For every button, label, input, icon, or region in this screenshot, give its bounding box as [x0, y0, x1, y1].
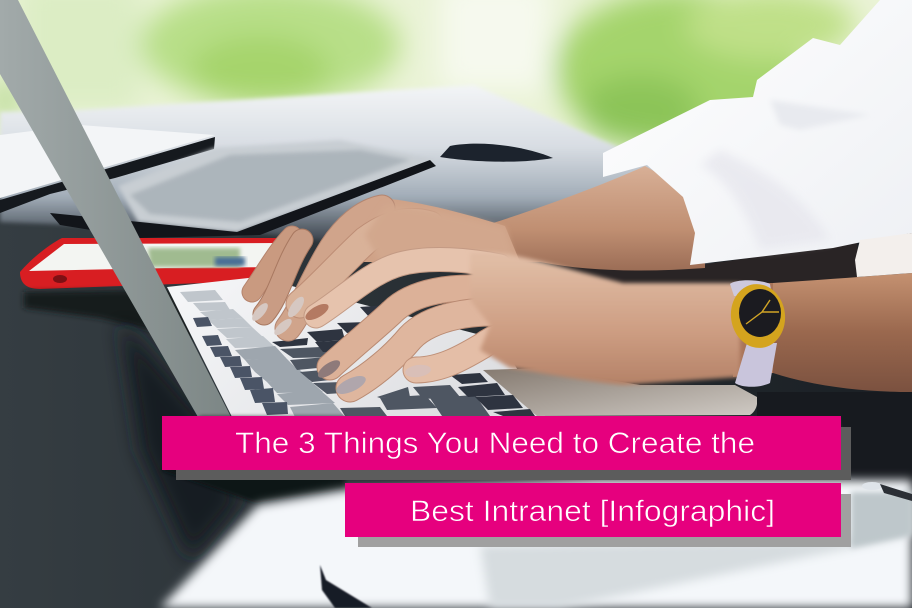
- wristwatch: [727, 280, 789, 387]
- laptop keyboard keys: [180, 290, 535, 417]
- far hand: [249, 198, 520, 338]
- laptop lid: [0, 0, 231, 417]
- dark tabletop strip between the arms: [545, 243, 860, 290]
- first title banner: [162, 416, 841, 470]
- far hand fingernails: [249, 294, 307, 338]
- second title banner: Best Intranet [Infographic]: [410, 495, 775, 528]
- computer mouse: [440, 144, 553, 162]
- dark desk surface: [0, 190, 912, 608]
- blurred foreground glass reflection: [160, 480, 912, 608]
- dark shadow beside laptop lid: [120, 320, 240, 560]
- bright reflective rear desk: [0, 85, 710, 270]
- tablet on desk: [0, 125, 215, 213]
- near hand and forearm: [303, 253, 912, 398]
- background wireless keyboard: [50, 140, 436, 238]
- first banner shadow: [176, 427, 851, 480]
- second banner shadow: [358, 494, 851, 547]
- dark shadow behind banners: [162, 417, 345, 503]
- laptop base: [167, 277, 545, 417]
- first title banner: The 3 Things You Need to Create the: [235, 427, 755, 460]
- dark desk right of laptop: [757, 392, 912, 492]
- white shirt sleeve: [603, 0, 912, 277]
- red smartphone: [20, 238, 284, 289]
- dark shadow under phone: [24, 290, 195, 340]
- laptop palm rest: [483, 368, 757, 416]
- near hand fingernails: [303, 301, 432, 398]
- far hand blend: [365, 205, 515, 262]
- blurred green garden background: [0, 0, 912, 160]
- far forearm: [480, 166, 705, 270]
- second title banner: [345, 483, 841, 537]
- back of near hand: [470, 253, 740, 385]
